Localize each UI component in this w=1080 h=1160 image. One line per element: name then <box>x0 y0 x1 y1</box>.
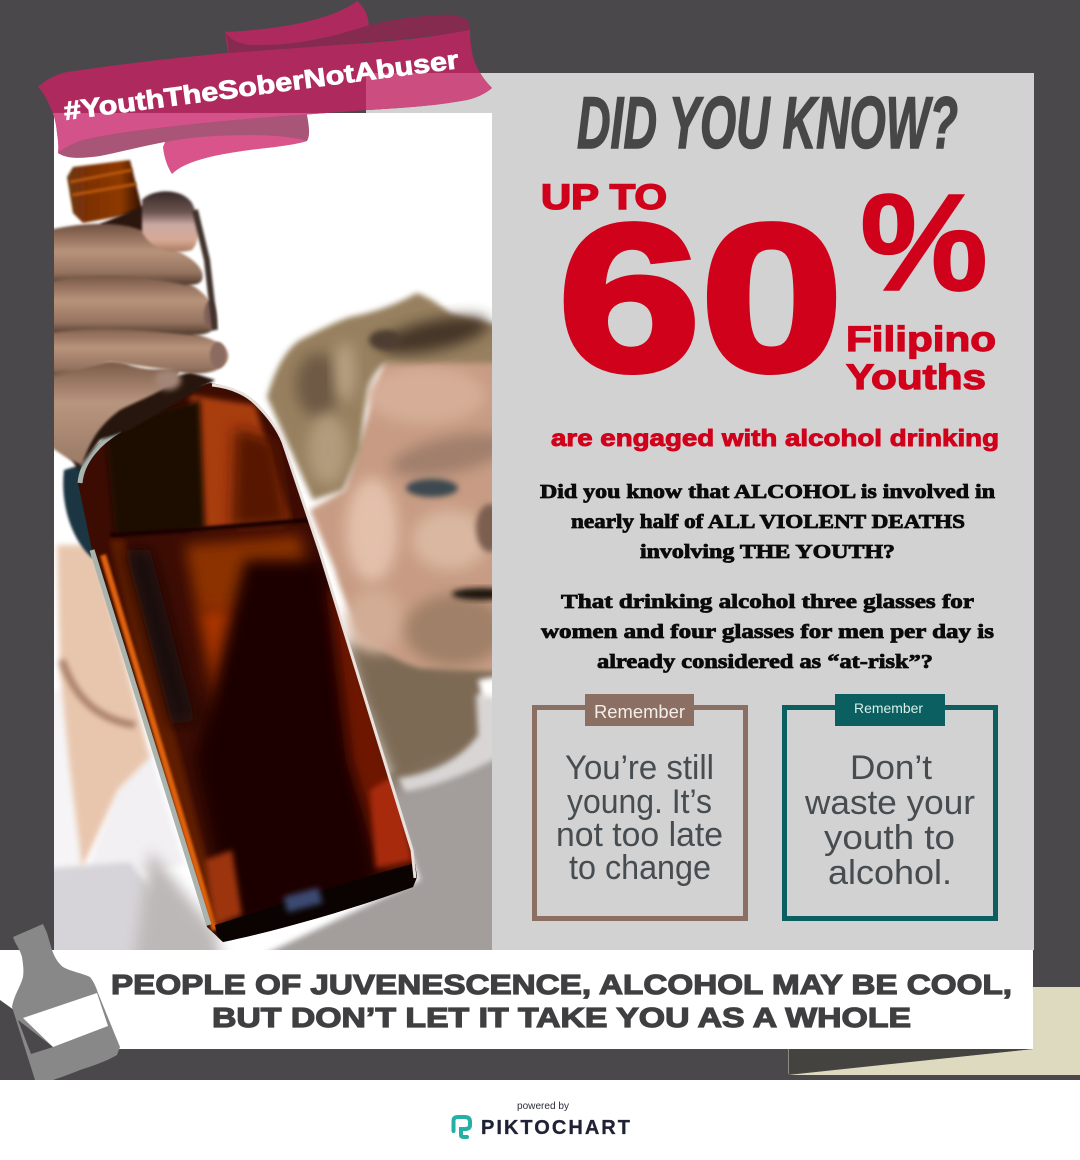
up to label: UP TO <box>541 178 667 217</box>
tag <box>585 694 694 726</box>
grey content panel <box>366 73 1034 950</box>
panel: remember box teal: waste your <box>804 784 975 822</box>
hand <box>40 191 228 470</box>
panel: remember box brown <box>534 694 746 918</box>
panel: remember box teal: Don’t <box>850 749 933 787</box>
bottle right edge highlight <box>212 385 415 878</box>
text block: violent deaths: Did you know that ALCOHOL is involved in <box>540 481 996 503</box>
icon: grey bottle <box>12 924 120 1080</box>
eye <box>406 479 458 497</box>
text block: at-risk: women and four glasses for men per day is <box>541 621 994 643</box>
shirt <box>54 692 492 950</box>
beige folded corner <box>788 987 1080 1075</box>
banner text: PEOPLE OF JUVENESCENCE, ALCOHOL MAY BE COOL, <box>111 969 1012 1000</box>
ribbon banner <box>38 1 492 174</box>
60 number: 60 <box>558 182 843 415</box>
tag <box>835 694 945 726</box>
collar <box>396 690 492 794</box>
text block: violent deaths <box>540 481 996 563</box>
big statistic <box>541 166 996 415</box>
white footer <box>0 1080 1080 1160</box>
bottle body <box>78 383 420 950</box>
panel: remember box teal: Remember <box>854 700 923 716</box>
powered by piktochart logo: powered by <box>517 1101 569 1112</box>
panel: remember box brown: young. It’s <box>567 783 712 821</box>
neck <box>347 634 492 795</box>
text block: violent deaths: nearly half of ALL VIOLENT DEATHS <box>571 511 965 533</box>
arm <box>57 545 150 868</box>
panel: remember box brown: not too late <box>556 816 723 854</box>
bottle left edge highlight <box>80 430 209 925</box>
ribbon fold bottom <box>58 105 309 158</box>
big statistic: Youths <box>846 358 986 397</box>
text block: at-risk: already considered as “at-risk”? <box>597 651 933 673</box>
hair <box>267 293 520 500</box>
text block: at-risk <box>541 591 994 673</box>
panel: remember box brown: Remember <box>594 702 685 722</box>
percent sign: % <box>860 166 988 320</box>
text block: violent deaths: involving THE YOUTH? <box>640 541 895 563</box>
statistic caption: are engaged with alcohol drinking <box>551 425 999 451</box>
mouth <box>452 588 512 600</box>
filipino youths label: Filipino <box>846 320 996 359</box>
bottom white banner: BUT DON’T LET IT TAKE YOU AS A WHOLE <box>212 1002 911 1033</box>
ribbon tail bottom <box>163 120 307 174</box>
panel: photo of boy holding a bottle <box>54 113 492 950</box>
powered by piktochart logo <box>454 1101 630 1139</box>
arm crease <box>62 660 135 725</box>
panel: remember box teal: alcohol. <box>828 854 952 892</box>
panel: remember box teal <box>784 694 996 918</box>
bottom white banner <box>0 950 1033 1050</box>
panel: remember box brown: You’re still <box>565 749 714 787</box>
ribbon fold top <box>225 15 470 56</box>
sleeve band <box>61 463 92 560</box>
hashtag: #YouthTheSoberNotAbuser <box>62 44 460 126</box>
text block: at-risk: That drinking alcohol three glasses for <box>561 591 974 613</box>
powered by piktochart logo: PIKTOCHART <box>481 1117 630 1139</box>
panel: remember box teal: youth to <box>824 819 955 857</box>
ribbon back tail top <box>225 1 369 53</box>
icon: piktochart mark <box>454 1117 470 1137</box>
ribbon main band <box>38 30 492 153</box>
bottle neck and cap <box>65 158 144 232</box>
panel: remember box brown: to change <box>569 849 711 887</box>
face <box>308 359 492 674</box>
